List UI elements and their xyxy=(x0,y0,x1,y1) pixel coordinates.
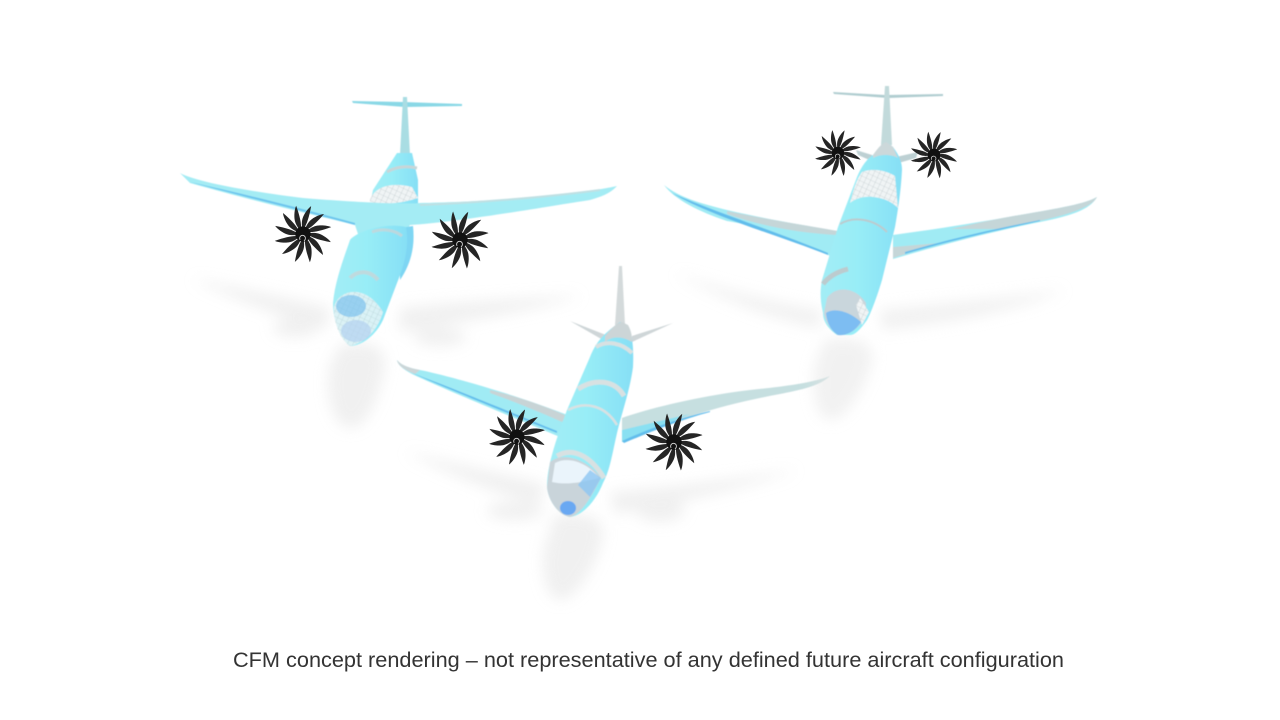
wing gray strip: left plane xyxy=(420,190,600,205)
tail: right plane xyxy=(833,86,943,145)
caption: CFM concept rendering – not representative of any defined future aircraft configuration xyxy=(233,649,1064,672)
fuselage tail cone: centre plane xyxy=(605,322,632,342)
airframe: right plane xyxy=(664,86,1097,335)
far fuselage: left plane xyxy=(370,153,418,205)
tail: left plane xyxy=(352,97,462,155)
fuselage bands: centre plane xyxy=(557,343,632,478)
rear lobe: left plane xyxy=(400,226,414,280)
ground shadow: centre plane xyxy=(405,452,798,600)
ground shadow: right plane xyxy=(675,273,1065,420)
fuselage: right plane xyxy=(821,142,902,335)
fuselage bands: right plane xyxy=(823,219,887,284)
nose detail: centre plane xyxy=(547,457,601,517)
engine pylons: right plane xyxy=(856,150,918,164)
mesh panel: right plane xyxy=(850,170,898,208)
wings: right plane xyxy=(664,185,1097,259)
fan: right plane left engine xyxy=(815,130,861,176)
fan: right plane right engine xyxy=(911,132,957,178)
wings: centre plane xyxy=(397,360,830,443)
nose detail: right plane xyxy=(824,290,869,335)
fan: left plane right engine xyxy=(432,212,488,268)
fuselage: centre plane xyxy=(547,322,633,517)
plane: left turboprop-style aircraft xyxy=(180,97,617,428)
wing leading edge: left plane xyxy=(190,182,355,225)
tail cone: right plane xyxy=(873,142,898,158)
nose detail: left plane xyxy=(334,292,383,346)
fan: centre plane left engine xyxy=(489,409,545,465)
mesh panel: left plane xyxy=(370,185,418,204)
plane: right aircraft with rear-mounted engines xyxy=(664,86,1097,420)
upper band: left plane xyxy=(387,167,417,172)
airframe: left plane xyxy=(180,97,617,346)
ground shadow: left plane xyxy=(192,279,582,428)
fan: left plane left engine xyxy=(275,206,331,262)
plane: centre aircraft xyxy=(397,266,830,600)
fuselage: left plane xyxy=(333,226,407,346)
fuselage bands: left plane xyxy=(350,230,402,280)
airframe: centre plane xyxy=(397,266,830,517)
tail: centre plane xyxy=(570,266,673,342)
wing: left plane xyxy=(180,173,617,240)
fan: centre plane right engine xyxy=(646,414,702,470)
